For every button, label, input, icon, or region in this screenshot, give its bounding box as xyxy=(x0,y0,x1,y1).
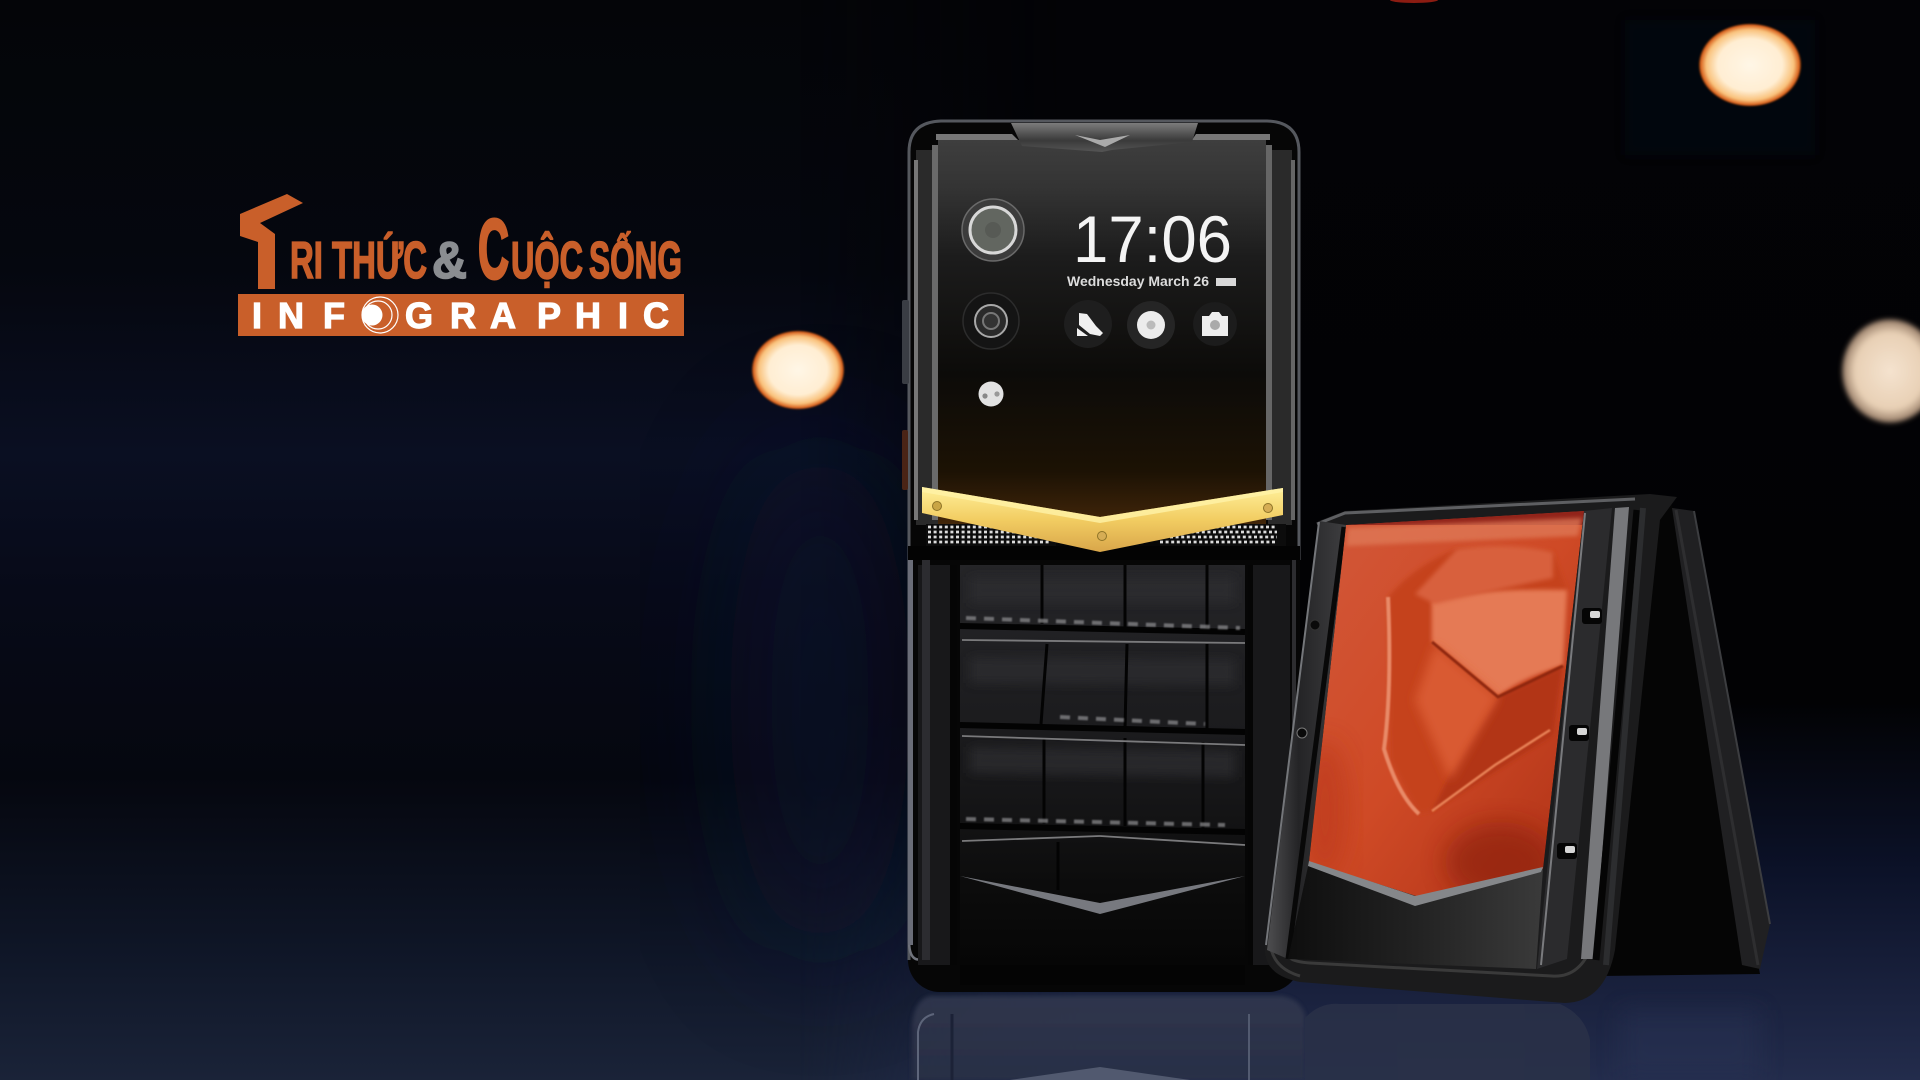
logo wordmark: RI THỨC xyxy=(290,232,427,290)
date line: Wednesday March 26 xyxy=(1067,274,1210,289)
icon: centre dial xyxy=(1127,301,1175,349)
clock time: 17:06 xyxy=(1073,202,1232,276)
banner globe icon xyxy=(362,297,398,333)
logo wordmark: C xyxy=(478,202,509,296)
rose petal folds xyxy=(1301,546,1567,902)
black band xyxy=(908,546,1300,560)
outer frame xyxy=(1265,494,1677,1003)
phone body xyxy=(908,120,1300,992)
banner text: GRAPHIC xyxy=(405,295,669,336)
logo wordmark xyxy=(290,202,682,296)
side frame rails xyxy=(902,145,1296,965)
hinge xyxy=(1011,123,1198,152)
bokeh light: red hint at top xyxy=(1390,0,1438,3)
bokeh light: top right xyxy=(1698,23,1802,107)
reflection of phones on the table xyxy=(912,996,1760,1080)
speaker mesh xyxy=(926,524,1286,546)
secondary camera xyxy=(963,293,1019,349)
lower dark panel xyxy=(1288,862,1543,969)
main camera xyxy=(962,199,1024,261)
bokeh light: right edge xyxy=(1840,317,1920,425)
left rail xyxy=(1267,521,1346,959)
lower chevron xyxy=(960,876,1245,914)
red leather panel xyxy=(1301,508,1590,902)
banner text xyxy=(252,295,669,336)
logo letter T xyxy=(240,194,303,289)
gold chevron xyxy=(922,487,1283,552)
background: dark navy stage xyxy=(0,319,1920,1080)
logo banner xyxy=(238,294,684,336)
right rails xyxy=(1537,507,1643,969)
bokeh light: centre left xyxy=(751,330,845,410)
logo wordmark: SỐNG xyxy=(589,231,682,290)
lower chevron trim xyxy=(1308,861,1543,906)
display screen xyxy=(938,140,1266,530)
logo wordmark: UỘC xyxy=(511,231,583,290)
left phone: front view xyxy=(902,120,1300,992)
banner text: INF xyxy=(252,295,345,336)
rear folded half xyxy=(1600,505,1770,976)
logo: Tri Thức & Cuộc Sống Infographic xyxy=(238,194,684,336)
logo wordmark: & xyxy=(432,232,467,290)
leather back panel xyxy=(960,565,1245,985)
icon: camera xyxy=(1193,302,1237,346)
right phone: open back view xyxy=(1265,494,1770,1003)
flash xyxy=(978,382,1004,406)
hinge screws xyxy=(1297,608,1602,859)
top frame highlight xyxy=(936,134,1270,140)
icon: steps shoe xyxy=(1064,300,1112,348)
leather scale rows xyxy=(960,565,1245,890)
